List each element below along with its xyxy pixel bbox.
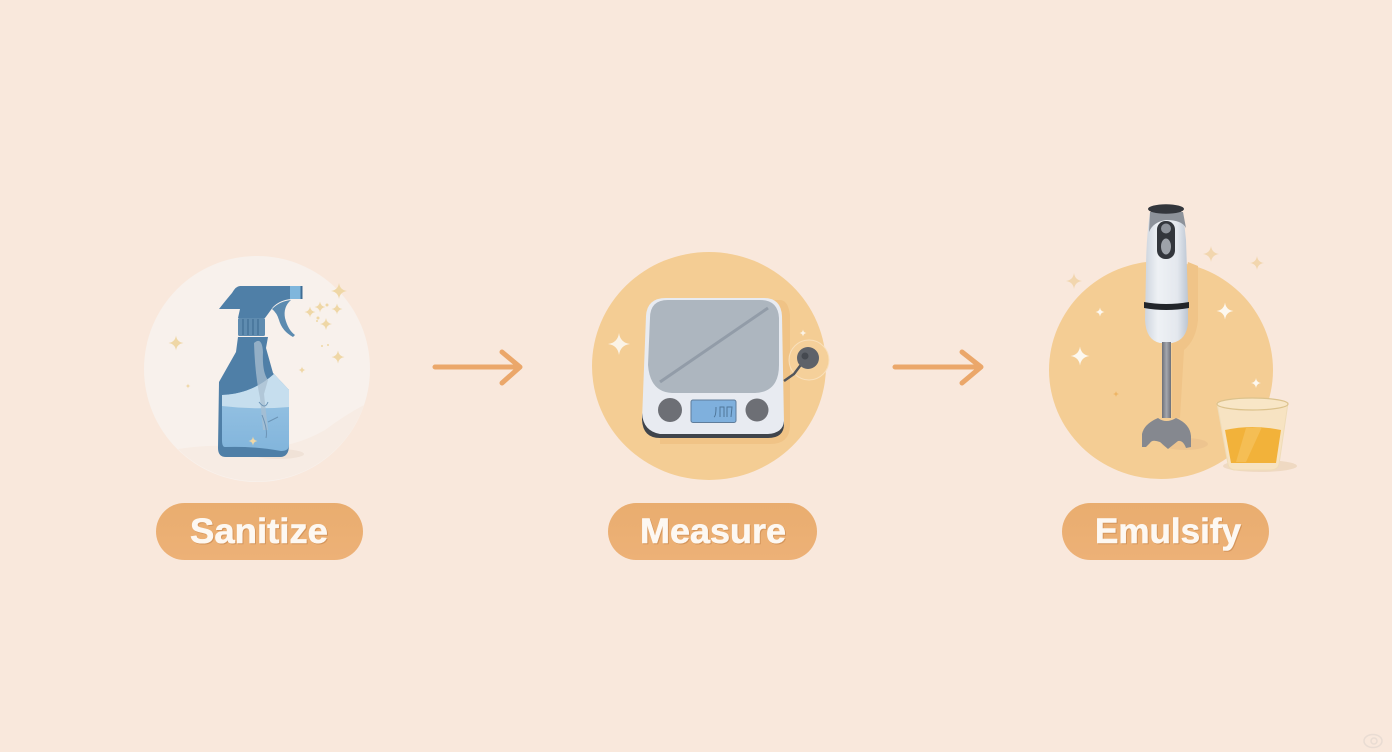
nozzle <box>290 286 302 299</box>
icon: immersion blender <box>1142 204 1208 450</box>
spray head <box>219 286 291 318</box>
display <box>691 400 736 422</box>
step: sanitize <box>144 256 370 560</box>
icon: kitchen scale <box>642 298 829 444</box>
icon: spray bottle <box>218 286 304 459</box>
label pill: Emulsify: Emulsify <box>1095 512 1242 551</box>
collar <box>238 318 265 336</box>
cord and knob <box>784 340 829 381</box>
step: measure <box>592 252 829 560</box>
arrow: sanitize to measure <box>435 352 520 383</box>
label pill: Sanitize: Sanitize <box>190 512 328 551</box>
liquid <box>1225 427 1281 463</box>
cap <box>1148 204 1184 214</box>
sparkles: sanitize <box>168 283 347 446</box>
highlight <box>254 341 268 430</box>
rim <box>1217 398 1288 410</box>
label pill: Sanitize <box>156 503 363 560</box>
water surface <box>222 374 289 408</box>
scale lower edge <box>642 413 784 438</box>
label pill: Measure <box>608 503 817 560</box>
weighing plate <box>648 300 779 393</box>
watermark icon <box>1364 734 1382 748</box>
arrow: measure to emulsify <box>895 352 981 383</box>
step: emulsify <box>1049 204 1297 560</box>
sparkles: emulsify <box>1066 246 1264 397</box>
black ring <box>1144 302 1189 310</box>
trigger <box>272 300 295 337</box>
icon circle: emulsify backdrop <box>1049 261 1273 479</box>
scale shadow <box>660 300 790 444</box>
glass <box>1217 403 1288 470</box>
label pill: Emulsify <box>1062 503 1269 560</box>
label pill: Measure: Measure <box>640 512 786 551</box>
bottle water <box>222 374 289 451</box>
icon circle: measure backdrop <box>592 252 826 480</box>
plate highlight line <box>660 308 768 382</box>
bottle upper <box>218 337 289 457</box>
buttons <box>658 398 682 422</box>
control panel <box>1157 221 1175 259</box>
icon circle: sanitize backdrop <box>144 256 370 482</box>
blender shadows <box>1172 262 1198 418</box>
sparkles: measure <box>608 330 806 355</box>
blade guard <box>1142 418 1191 449</box>
icon: glass of oil <box>1217 398 1297 472</box>
shaft <box>1162 342 1171 418</box>
handle <box>1145 212 1188 343</box>
scale base <box>642 298 784 437</box>
